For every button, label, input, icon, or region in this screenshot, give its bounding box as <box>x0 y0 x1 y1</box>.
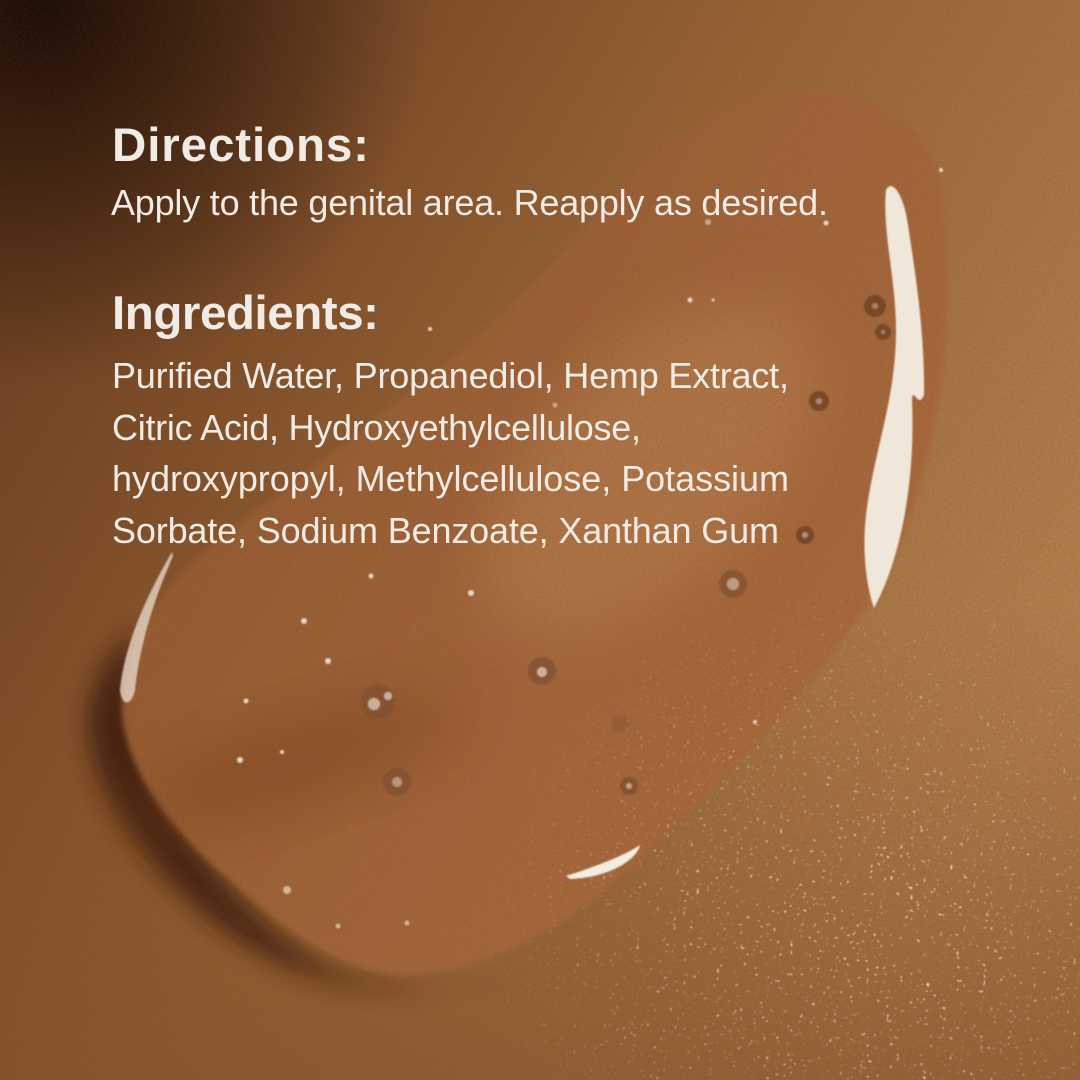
highlight: bottom gel glare <box>566 845 640 879</box>
highlight: right gel glare <box>864 186 924 608</box>
text: ingredients list: Sorbate, Sodium Benzoate, Xanthan Gum <box>112 510 779 551</box>
bubbles <box>237 168 943 928</box>
text: ingredients list: hydroxypropyl, Methylcellulose, Potassium <box>112 458 789 499</box>
highlight: left gel glare <box>120 552 173 702</box>
heading: Directions: Directions: <box>112 119 369 172</box>
spray of droplets on skin <box>440 600 1080 1080</box>
text: ingredients list <box>112 355 789 551</box>
text: ingredients list: Purified Water, Propanediol, Hemp Extract, <box>112 355 789 396</box>
text: ingredients list: Citric Acid, Hydroxyethylcellulose, <box>112 407 641 448</box>
heading: Ingredients: Ingredients: <box>112 287 379 340</box>
gel smear <box>88 90 947 991</box>
text: directions body: Apply to the genital area. Reapply as desired. <box>111 182 828 223</box>
